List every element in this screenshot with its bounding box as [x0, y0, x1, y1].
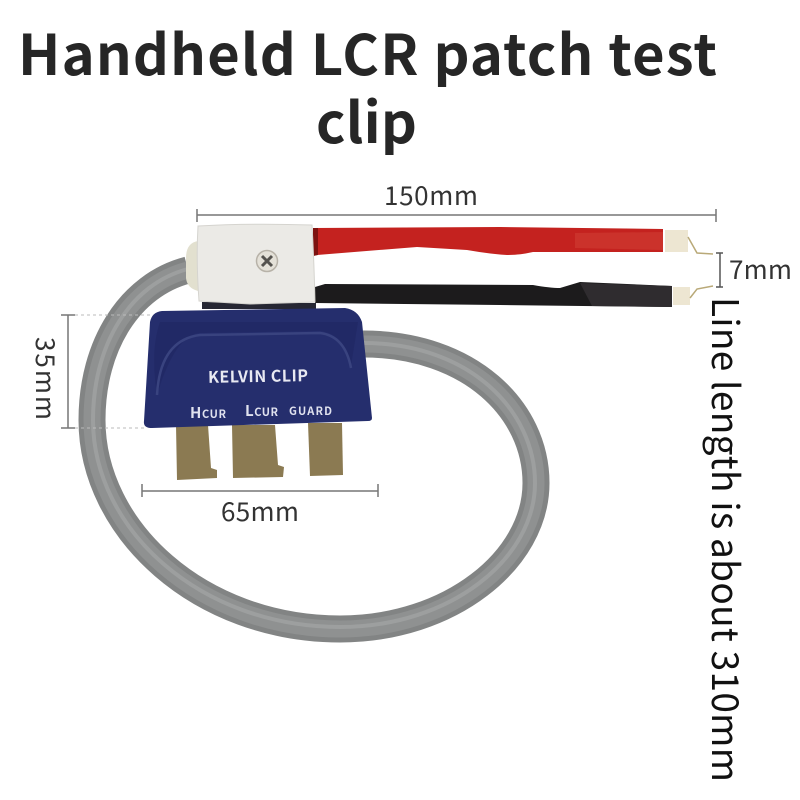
red test lead: [313, 227, 713, 256]
dimension: 150mm: 150mm: [384, 176, 478, 213]
terminal labels: LCUR: [245, 400, 278, 421]
blue clip body: [144, 308, 372, 428]
red lead metal tip: [665, 230, 713, 254]
terminal labels: HCUR: [190, 402, 226, 423]
dimension: 35mm: [28, 315, 150, 428]
terminal labels: [190, 400, 332, 423]
dimension: 65mm: [142, 484, 378, 529]
title: Handheld LCR patch test: [18, 11, 717, 92]
screw icon: [256, 250, 278, 272]
gray cable loop: [92, 269, 536, 629]
line length note: Line length is about 310mm: [701, 297, 755, 782]
title: [18, 11, 717, 160]
terminal labels: GUARD: [289, 403, 332, 419]
black lead metal tip: [673, 286, 713, 305]
title: clip: [316, 79, 417, 160]
white clip housing: [186, 224, 316, 309]
dimension: 35mm: 35mm: [28, 337, 65, 420]
black test lead: [315, 282, 713, 307]
dimension: 150mm: [197, 176, 716, 222]
kelvin clip label: KELVIN CLIP: [208, 362, 308, 388]
dimension: 65mm: 65mm: [221, 492, 299, 529]
metal prongs: [176, 423, 343, 480]
dimension: 7mm: 7mm: [729, 250, 792, 287]
